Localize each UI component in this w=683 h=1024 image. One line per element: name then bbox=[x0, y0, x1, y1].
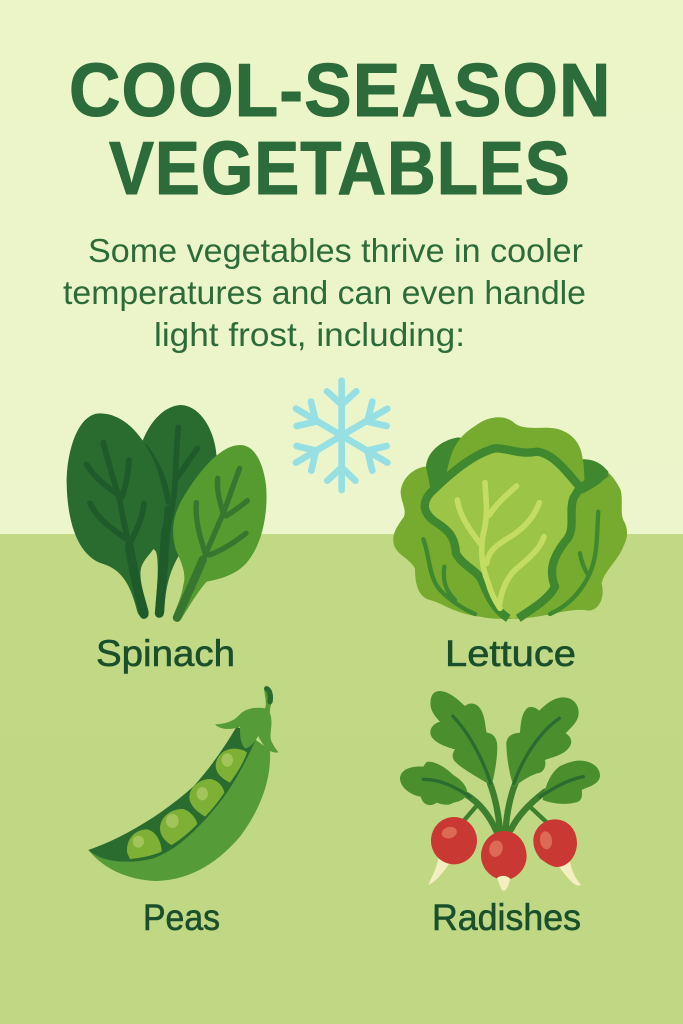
radish highlights bbox=[440, 825, 553, 858]
heart outline bbox=[425, 448, 607, 618]
intro text bbox=[63, 232, 586, 353]
intro text: temperatures and can even handle bbox=[63, 274, 586, 311]
pod opening bbox=[88, 727, 257, 862]
peas bbox=[127, 749, 247, 859]
radish bulbs bbox=[431, 817, 577, 879]
lettuce light veins bbox=[457, 483, 544, 608]
icon: spinach bbox=[67, 405, 267, 622]
label: Radishes: Radishes bbox=[432, 897, 581, 938]
pod body bbox=[88, 727, 270, 881]
label: Lettuce: Lettuce bbox=[445, 633, 576, 674]
icon: pea pod bbox=[88, 689, 279, 881]
label: Spinach: Spinach bbox=[96, 633, 235, 674]
pea highlights bbox=[133, 753, 233, 848]
front spinach leaf bbox=[173, 445, 267, 622]
title bbox=[69, 49, 611, 211]
icon: lettuce bbox=[393, 417, 627, 619]
radish stems bbox=[467, 782, 545, 832]
calyx and stem bbox=[215, 689, 279, 753]
back spinach leaf bbox=[142, 405, 217, 617]
top wrapping leaf bbox=[447, 417, 585, 488]
lettuce dark veins bbox=[423, 512, 598, 614]
left spinach leaf bbox=[67, 413, 164, 618]
heart of lettuce bbox=[425, 448, 580, 619]
label: Peas: Peas bbox=[143, 897, 220, 938]
title: COOL-SEASON bbox=[69, 49, 611, 132]
radish leaves bbox=[430, 691, 497, 786]
radish roots bbox=[428, 858, 581, 891]
outer lettuce leaves bbox=[393, 460, 627, 619]
intro text: Some vegetables thrive in cooler bbox=[88, 232, 583, 269]
icon: snowflake bbox=[296, 381, 387, 490]
dark rear leaves bbox=[426, 437, 608, 500]
title: VEGETABLES bbox=[109, 127, 570, 211]
radish leaf veins bbox=[423, 716, 583, 797]
intro text: light frost, including: bbox=[154, 316, 465, 353]
icon: radishes bbox=[400, 691, 600, 891]
